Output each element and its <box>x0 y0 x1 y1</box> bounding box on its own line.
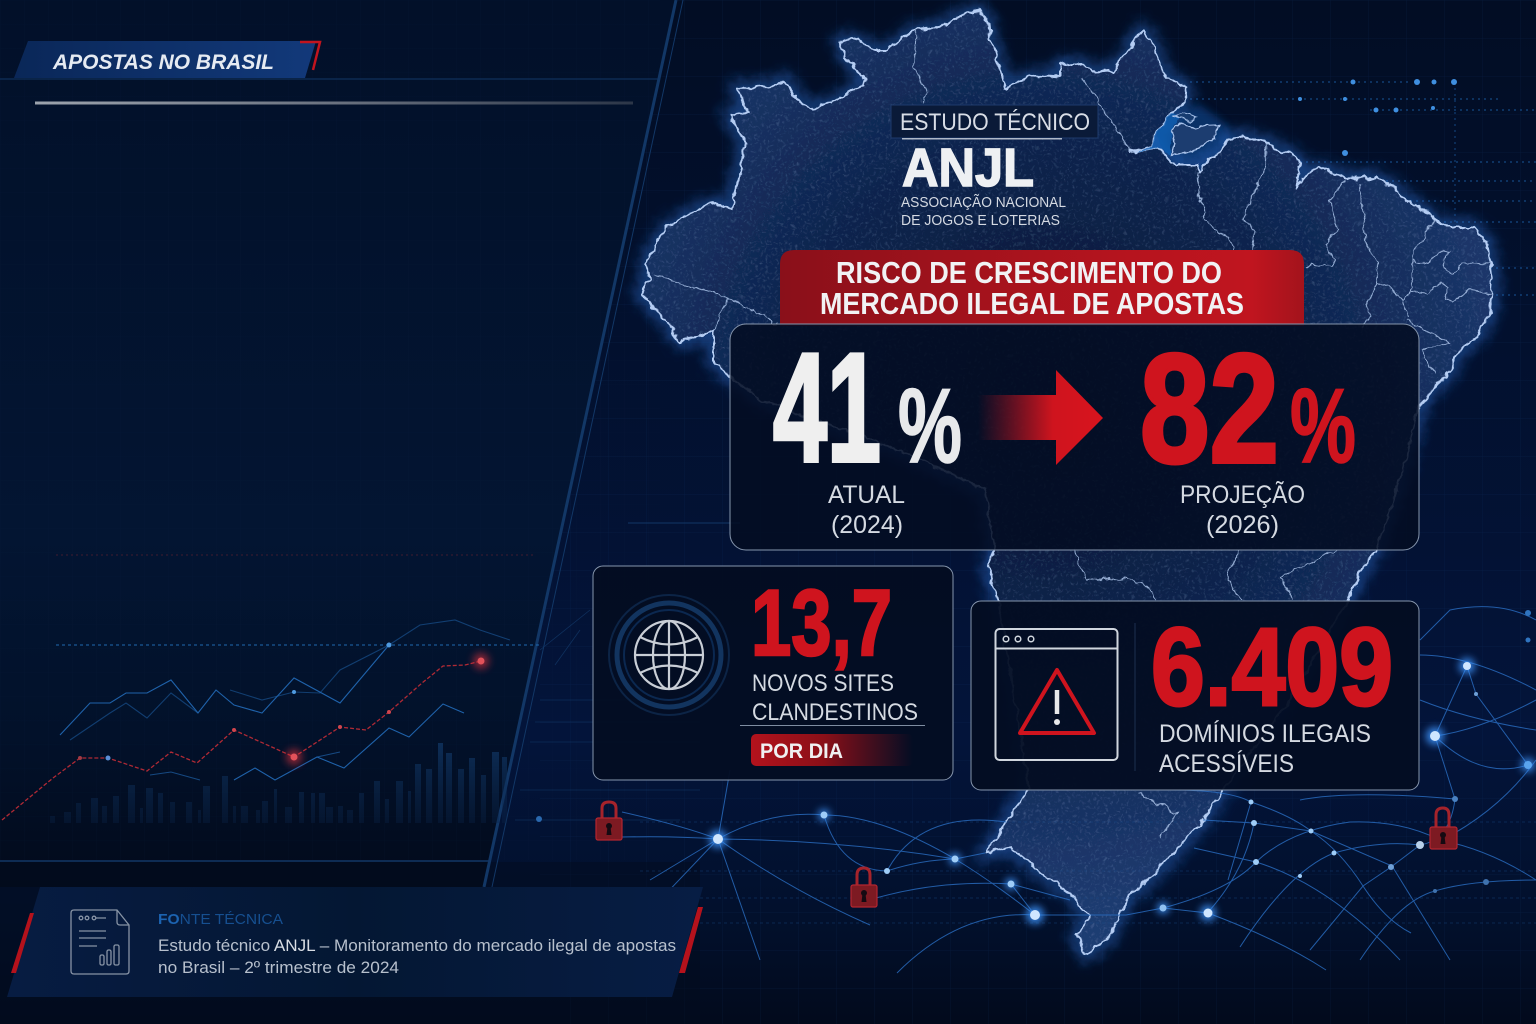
icon: document <box>71 910 129 974</box>
panel: main comparison <box>730 321 1419 550</box>
label: projeção: PROJEÇÃO <box>1180 480 1305 509</box>
label: domínios ilegais acessíveis <box>1159 719 1371 778</box>
header rule <box>35 102 633 104</box>
title banner <box>780 250 1304 326</box>
line and bar chart <box>2 555 540 823</box>
icon: browser warning <box>996 629 1118 760</box>
stat: 6.409: 6.409 <box>1151 606 1393 729</box>
panel: novos sites <box>593 566 953 780</box>
icon: lock center <box>851 868 877 907</box>
label: novos sites clandestinos <box>740 670 925 726</box>
41 percent: 41 <box>773 321 881 494</box>
icon: lock left <box>596 802 622 840</box>
slanted dividers <box>0 0 740 887</box>
panel: domínios <box>971 601 1419 790</box>
arrow <box>978 370 1103 465</box>
82 percent: 82 <box>1140 322 1279 495</box>
label: projeção: (2026) <box>1206 511 1279 539</box>
estudo técnico tag: ESTUDO TÉCNICO <box>900 109 1090 136</box>
82 percent: % <box>1290 367 1356 485</box>
network nodes <box>536 610 1535 924</box>
brazil map <box>630 0 1510 970</box>
icon: globe <box>609 595 729 715</box>
network lines <box>596 607 1536 973</box>
logo: ANJL: ASSOCIAÇÃO NACIONAL <box>901 194 1066 211</box>
header tag: APOSTAS NO BRASIL <box>52 51 274 74</box>
source text: FONTE TÉCNICA <box>158 911 283 928</box>
logo: ANJL <box>901 138 1066 229</box>
label: atual: ATUAL <box>828 481 905 509</box>
title banner: RISCO DE CRESCIMENTO DO <box>836 255 1222 290</box>
amazon delta glow <box>1130 105 1232 165</box>
panel: left dark area <box>0 0 700 1024</box>
source text <box>158 911 676 977</box>
title banner: MERCADO ILEGAL DE APOSTAS <box>820 286 1244 321</box>
red trend line <box>2 661 481 820</box>
badge: por dia <box>751 734 913 766</box>
label: domínios ilegais acessíveis: DOMÍNIOS ILEGAIS <box>1159 719 1371 748</box>
label: novos sites clandestinos: CLANDESTINOS <box>752 699 918 726</box>
bar chart <box>50 743 507 823</box>
logo: ANJL: ANJL <box>902 138 1034 198</box>
label: projeção <box>1180 480 1305 539</box>
label: novos sites clandestinos: NOVOS SITES <box>752 670 894 697</box>
label: atual <box>828 481 905 539</box>
41 percent: % <box>898 367 962 485</box>
stat: 13,7: 13,7 <box>751 570 892 675</box>
source text: no Brasil – 2º trimestre de 2024 <box>158 959 399 977</box>
badge: por dia: POR DIA <box>760 740 843 763</box>
logo: ANJL: DE JOGOS E LOTERIAS <box>901 212 1060 229</box>
dashed reference lines <box>56 644 540 646</box>
blue trend lines <box>60 620 510 780</box>
source text: Estudo técnico ANJL – Monitoramento do mercado ilegal de apostas <box>158 937 676 955</box>
data grid dots, upper right <box>1190 79 1536 295</box>
label: domínios ilegais acessíveis: ACESSÍVEIS <box>1159 749 1294 778</box>
header tag <box>14 41 320 78</box>
label: atual: (2024) <box>831 511 903 539</box>
panel: source footer <box>7 887 703 997</box>
icon: lock right <box>1430 808 1457 849</box>
